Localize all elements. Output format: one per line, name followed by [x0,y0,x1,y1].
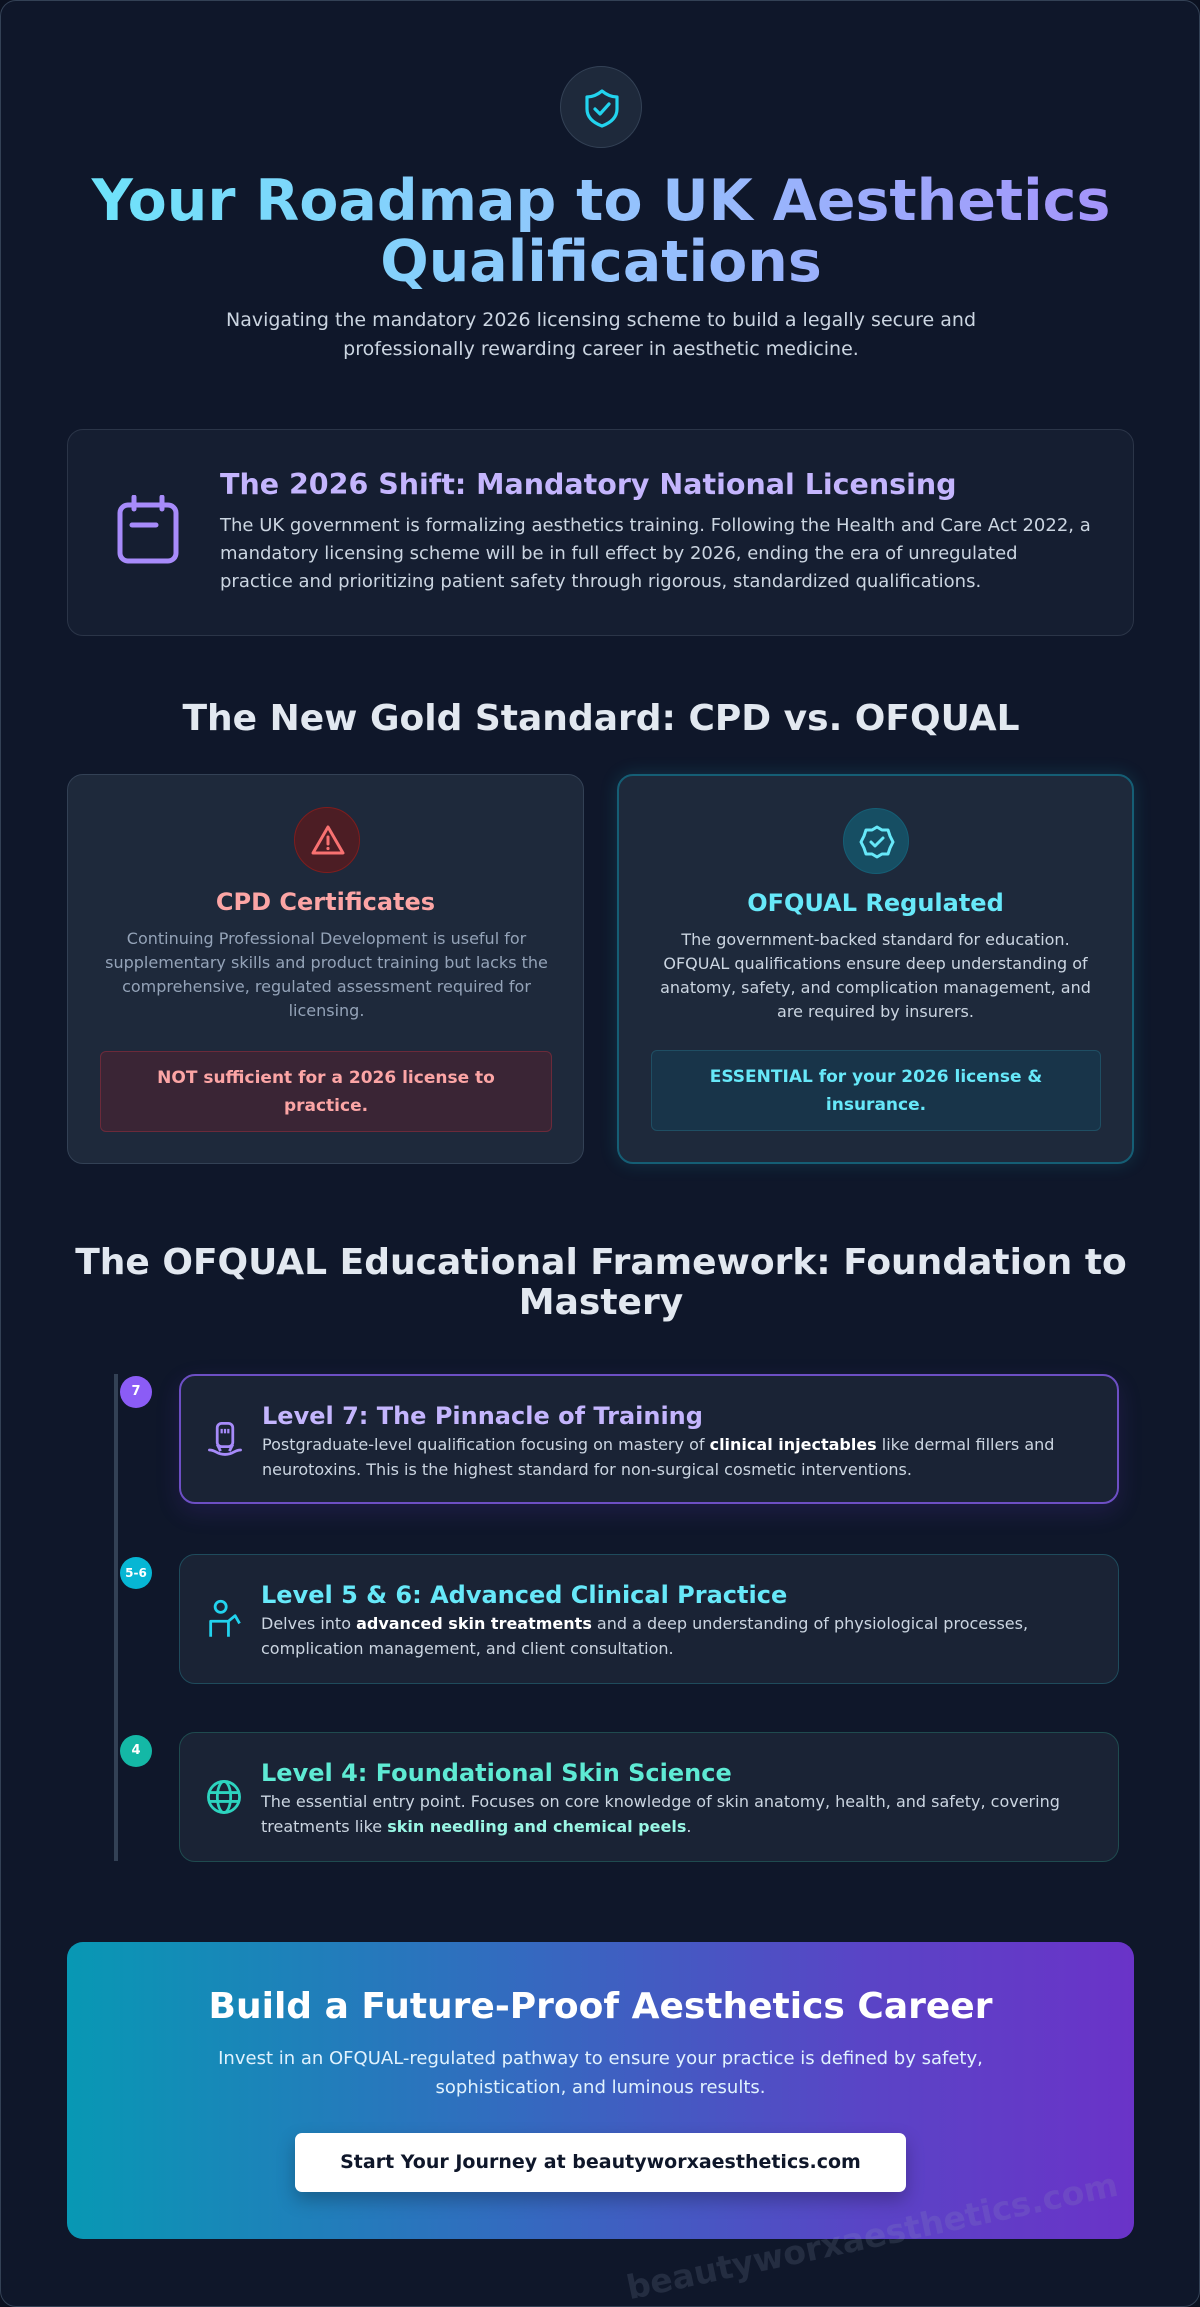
panel: OFQUAL [617,774,1134,1164]
card title: CPD Certificates [216,888,435,916]
level 7 card: Postgraduate-level qualification focusing on mastery of clinical injectables like dermal fillers and neurotoxins. This is the highest standard for non-surgical cosmetic interventions. [262,1435,1054,1479]
heading: framework [75,1242,1127,1323]
panel heading: The 2026 Shift: Mandatory National Licensing [220,468,957,501]
card title: OFQUAL Regulated [747,889,1004,917]
CTA button: Start Your Journey at beautyworxaesthetics.com [340,2151,861,2173]
marker: 4 [120,1735,152,1767]
level 4 card [179,1732,1119,1862]
subtitle: Navigating the mandatory 2026 licensing scheme to build a legally secure and professionally rewarding career in aesthetic medicine. [226,309,976,360]
card text: The government-backed standard for education. OFQUAL qualifications ensure deep understanding of anatomy, safety, and complication management, and are required by insurers. [660,930,1091,1021]
panel text: The UK government is formalizing aesthetics training. Following the Health and Care Act 2022, a [220,515,1091,536]
watermark: beautyworxaesthetics.com [623,2165,1121,2307]
icon: syringe [208,1422,242,1456]
badge: essential: insurance. [826,1095,926,1115]
badge: not sufficient [100,1051,552,1132]
panel text [220,515,1091,592]
icon: badge check [843,808,909,874]
panel text: mandatory licensing scheme will be in full effect by 2026, ending the era of unregulated [220,543,1018,564]
marker: 7: 7 [131,1384,141,1399]
marker: 5-6: 5-6 [125,1566,147,1580]
level 5-6 card: Level 5 & 6: Advanced Clinical Practice [261,1581,787,1609]
heading: framework: Mastery [519,1282,683,1323]
icon: practitioner [209,1600,241,1637]
badge: essential: ESSENTIAL for your 2026 license & [710,1067,1042,1087]
panel: 2026 shift [67,429,1134,636]
marker: 7 [120,1376,152,1408]
card text: Continuing Professional Development is useful for supplementary skills and product training but lacks the comprehensive, regulated assessment required for licensing. [105,929,548,1020]
panel text: practice and prioritizing patient safety through rigorous, standardized qualifications. [220,571,981,592]
panel: CPD [67,774,584,1164]
icon: warning [294,807,360,873]
badge: essential [651,1050,1101,1131]
level 7 card [179,1374,1119,1504]
heading: gold standard: The New Gold Standard: CPD vs. OFQUAL [182,698,1020,739]
level 5-6 card [179,1554,1119,1684]
level 5-6 card: Delves into advanced skin treatments and a deep understanding of physiological processes, complication management, and client consultation. [261,1614,1028,1658]
icon: globe [207,1780,241,1814]
CTA heading: Build a Future-Proof Aesthetics Career [209,1986,992,2027]
level 7 card: Level 7: The Pinnacle of Training [262,1402,703,1430]
title: Qualifications [380,229,822,295]
title [1,171,1200,293]
level 4 card: Level 4: Foundational Skin Science [261,1759,732,1787]
CTA button [295,2133,906,2192]
CTA panel [67,1942,1134,2239]
marker: 4: 4 [131,1743,141,1758]
heading: framework: The OFQUAL Educational Framework: Foundation to [75,1242,1127,1283]
timeline [114,1374,118,1861]
icon: shield [560,66,642,148]
CTA text: Invest in an OFQUAL-regulated pathway to ensure your practice is defined by safety, sophistication, and luminous results. [218,2048,983,2098]
badge: not sufficient: practice. [284,1096,368,1116]
icon: calendar [118,495,178,564]
marker: 5-6 [120,1557,152,1589]
badge: not sufficient: NOT sufficient for a 2026 license to [157,1068,495,1088]
title: Your Roadmap to UK Aesthetics [92,168,1110,234]
level 4 card: The essential entry point. Focuses on core knowledge of skin anatomy, health, and safety, covering treatments like skin needling and chemical peels. [261,1792,1060,1836]
